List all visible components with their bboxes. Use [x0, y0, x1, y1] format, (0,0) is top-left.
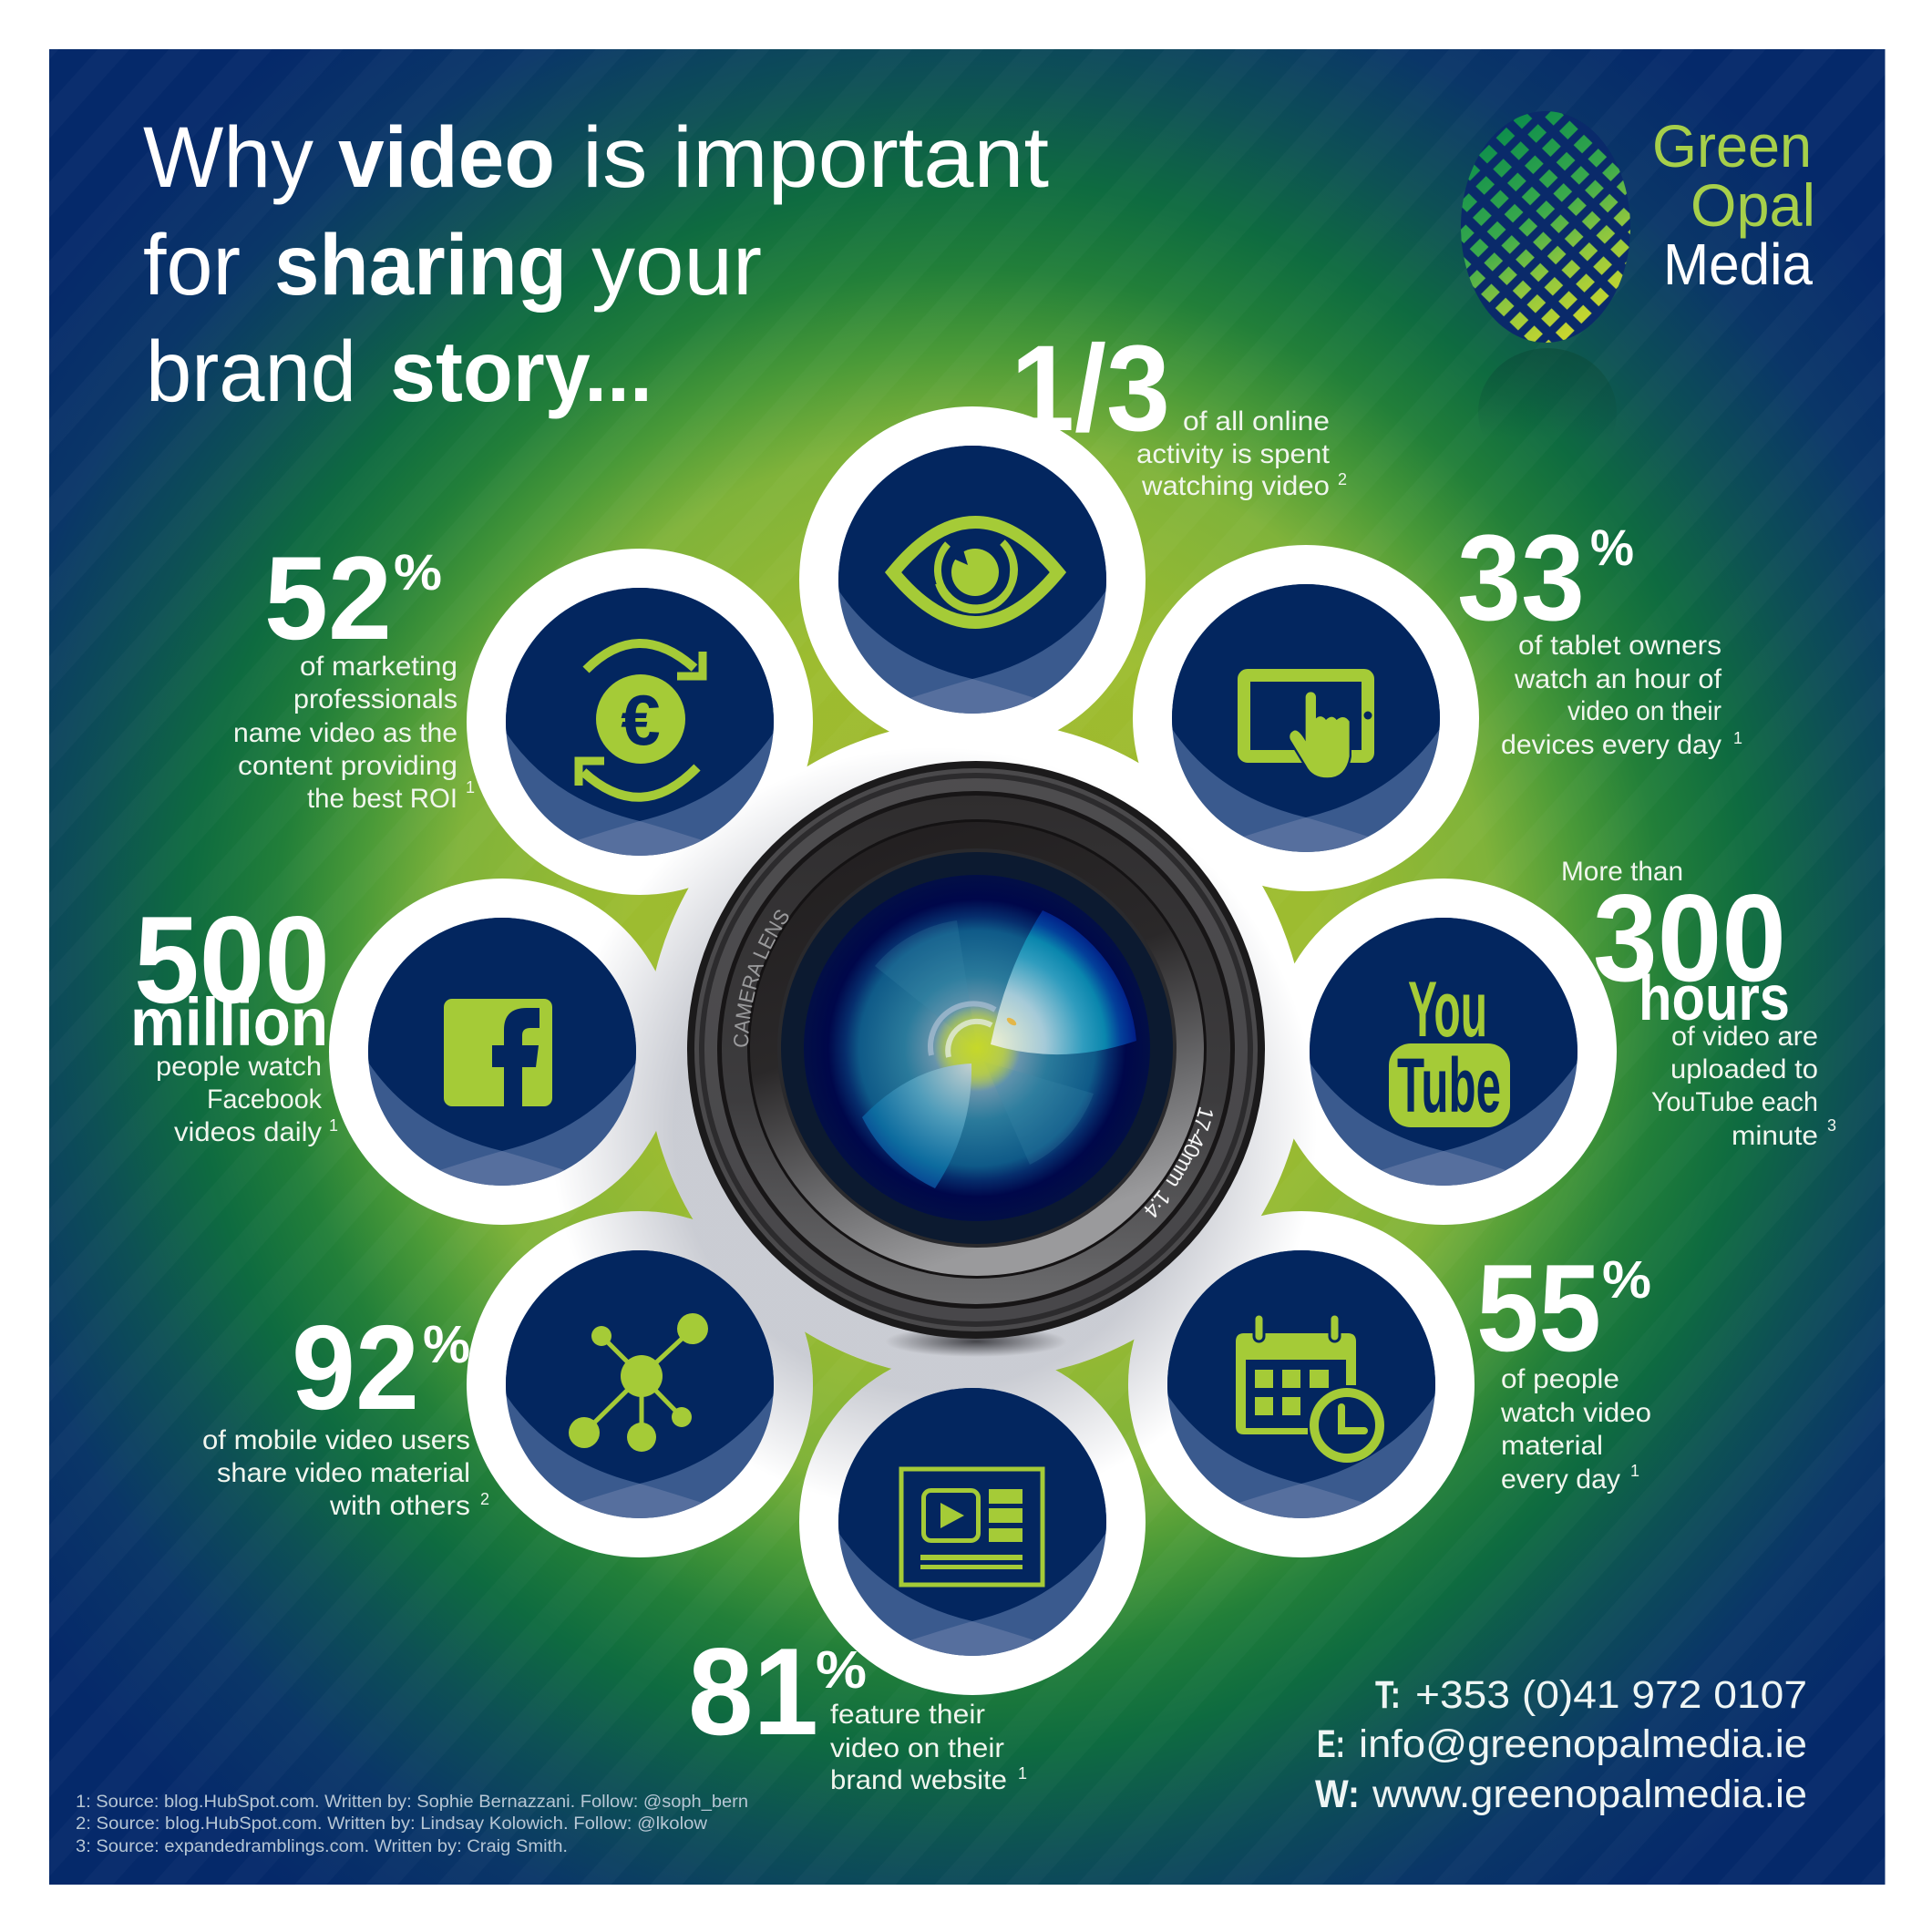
logo globe [1461, 111, 1630, 408]
lens label: focal length: 17-40mm 1:4 [1145, 1106, 1213, 1218]
stat: 81 percent: 1 [1018, 1764, 1027, 1783]
contact details: +353 (0)41 972 0107 [1415, 1673, 1807, 1717]
contact details: www.greenopalmedia.ie [1372, 1773, 1807, 1816]
stat: 81 percent: 81 [688, 1622, 818, 1761]
title: brand [146, 324, 356, 420]
title: your [591, 217, 762, 313]
stat: 500 million: Facebook [207, 1084, 323, 1115]
stat: 55 percent: material [1501, 1431, 1603, 1461]
title: story... [390, 324, 653, 420]
stat: one third: 2 [1338, 470, 1347, 488]
title: video [338, 109, 555, 206]
stat: 500 million [130, 890, 338, 1147]
stat: 55 percent: 55 [1476, 1238, 1601, 1377]
title [143, 109, 1049, 420]
stat: one third: of all online [1183, 406, 1330, 437]
stat: 52 percent: professionals [293, 684, 457, 714]
icon: YouTube: Tube [1397, 1043, 1501, 1128]
stat: 300 hours: uploaded to [1670, 1054, 1818, 1084]
sources footnotes: 2: Source: blog.HubSpot.com. Written by: Lindsay Kolowich. Follow: @lkolow [76, 1814, 707, 1834]
logo wordmark: Green [1652, 112, 1812, 180]
stat: 300 hours: hours [1639, 962, 1790, 1033]
title: sharing [274, 217, 567, 313]
stat: 92 percent: with others [329, 1491, 470, 1521]
stat: 300 hours: More than [1561, 857, 1683, 887]
icon: euro exchange: € [621, 680, 661, 760]
contact details: T: [1375, 1673, 1401, 1717]
stat: 55 percent [1476, 1238, 1651, 1495]
stat: 52 percent: content providing [238, 751, 457, 781]
icon: video web page [836, 1385, 1109, 1704]
contact details [1315, 1673, 1807, 1816]
title: Why [143, 109, 313, 206]
stat: 500 million: 1 [329, 1116, 338, 1135]
stat: 92 percent: share video material [217, 1458, 470, 1488]
title: for [143, 217, 241, 313]
stat: 52 percent: of marketing [300, 652, 457, 682]
stat: 500 million: videos daily [174, 1117, 322, 1147]
camera lens [687, 761, 1265, 1339]
stat: one third: activity is spent [1136, 439, 1331, 469]
stat: 81 percent [688, 1622, 1027, 1795]
stat: 300 hours: minute [1732, 1121, 1818, 1151]
stat: 52 percent: the best ROI [307, 784, 457, 814]
stat: one third: watching video [1141, 471, 1330, 501]
icon: YouTube [1307, 915, 1580, 1234]
stat: 33 percent: 33 [1457, 510, 1585, 646]
stat: 55 percent: every day [1501, 1464, 1620, 1495]
stat: 300 hours: of video are [1671, 1022, 1818, 1052]
logo wordmark: Media [1663, 231, 1813, 297]
stat: 55 percent: watch video [1500, 1398, 1651, 1428]
stat: 52 percent: % [394, 543, 442, 601]
icon: YouTube: You [1408, 966, 1487, 1053]
stat: 33 percent [1457, 510, 1742, 760]
stat: 500 million: million [130, 984, 328, 1060]
stat: 300 hours: 300 [1593, 868, 1786, 1007]
icon: calendar and clock [1165, 1248, 1438, 1567]
stat: 55 percent: of people [1501, 1364, 1619, 1394]
stat: 33 percent: 1 [1733, 729, 1742, 747]
lens label: camera lens: CAMERA LENS [734, 909, 789, 1047]
lens barrel rings [687, 761, 1265, 1339]
contact details: info@greenopalmedia.ie [1359, 1722, 1807, 1766]
icon: network share [503, 1248, 776, 1567]
icon: Facebook [365, 915, 639, 1234]
logo wordmark [1652, 112, 1815, 297]
stat: 92 percent [202, 1300, 489, 1521]
icon: euro exchange [503, 585, 776, 904]
stat: 55 percent: 1 [1630, 1462, 1639, 1480]
stat: 92 percent: 2 [480, 1490, 489, 1508]
stat: 55 percent: % [1602, 1250, 1651, 1310]
icon: eye [836, 443, 1109, 762]
stat: 300 hours: YouTube each [1651, 1087, 1818, 1117]
stat: 52 percent: 52 [264, 531, 392, 664]
logo: Green Opal Media [1461, 111, 1813, 408]
stat: 92 percent: of mobile video users [202, 1425, 470, 1455]
stat: 300 hours [1561, 857, 1836, 1151]
sources footnotes [76, 1793, 748, 1856]
title: is important [582, 109, 1049, 206]
stat: 33 percent: devices every day [1501, 730, 1721, 760]
stat: 81 percent: feature their [830, 1700, 985, 1730]
stat: 500 million: people watch [156, 1052, 322, 1082]
sources footnotes: 1: Source: blog.HubSpot.com. Written by: Sophie Bernazzani. Follow: @soph_bern [76, 1793, 748, 1812]
stat: 300 hours: 3 [1827, 1116, 1836, 1135]
stat: 92 percent: % [423, 1315, 470, 1374]
stat: 81 percent: % [816, 1640, 867, 1700]
stat: 52 percent: name video as the [233, 718, 457, 748]
stat: 33 percent: watch an hour of [1514, 664, 1722, 694]
stat: 81 percent: brand website [830, 1765, 1007, 1795]
contact details: E: [1317, 1722, 1345, 1766]
contact details: W: [1315, 1773, 1360, 1816]
stat: 81 percent: video on their [830, 1733, 1004, 1763]
stat: 92 percent: 92 [292, 1300, 419, 1434]
stat: one third: 1/3 [1011, 321, 1170, 457]
logo wordmark: Opal [1690, 171, 1815, 239]
stat: 52 percent: 1 [466, 778, 475, 796]
icon: tablet with hand [1169, 581, 1443, 900]
sources footnotes: 3: Source: expandedramblings.com. Written by: Craig Smith. [76, 1837, 568, 1856]
stat: 33 percent: % [1590, 519, 1634, 576]
stat: one third [1011, 321, 1347, 501]
lens iris [804, 875, 1150, 1221]
stat: 33 percent: video on their [1567, 696, 1721, 726]
stat: 52 percent [233, 531, 475, 814]
stat: 500 million: 500 [134, 890, 330, 1029]
white hub and rings [329, 406, 1617, 1695]
stat: 33 percent: of tablet owners [1518, 631, 1721, 661]
